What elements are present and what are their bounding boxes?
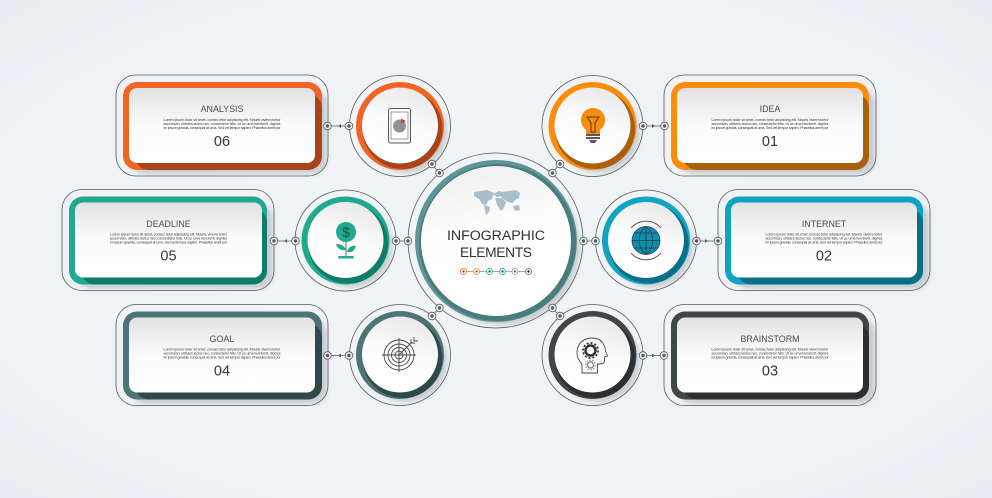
number: 05	[160, 248, 177, 264]
mini step dots	[460, 268, 532, 274]
heading: GOAL	[210, 334, 234, 344]
body text: accumsan, ultricies lectus nec, consectetur felis. Ut ac urna hendrerit, digniss	[164, 352, 281, 356]
central circle	[408, 153, 583, 328]
card: internet	[718, 190, 930, 290]
card: idea	[664, 75, 876, 176]
body text: accumsan, ultricies lectus nec, consectetur felis. Ut ac urna hendrerit, digniss	[766, 236, 883, 240]
body text	[164, 348, 281, 360]
connectors: central hub links	[392, 160, 599, 320]
body text: im ipsum gravida, consequat at urna. Sed vel tempor sapien. Phasellus amet por	[712, 356, 829, 360]
number: 04	[214, 364, 230, 380]
icon: money plant: $	[342, 224, 350, 240]
body text: Lorem ipsum dolor sit amet, consec tetur adipiscing elit. Mauris viverra tortor	[712, 118, 829, 122]
number: 06	[214, 134, 230, 150]
card: brainstorm	[664, 304, 876, 406]
body text	[164, 118, 281, 130]
heading: ANALYSIS	[201, 104, 243, 114]
card: goal	[116, 304, 328, 406]
title: ELEMENTS	[460, 245, 532, 260]
icon: globe	[631, 221, 661, 260]
body text: accumsan, ultricies lectus nec, consectetur felis. Ut ac urna hendrerit, digniss	[712, 122, 829, 126]
body text: im ipsum gravida, consequat at urna. Sed vel tempor sapien. Phasellus amet por	[110, 240, 228, 244]
connector: analysis	[324, 122, 353, 130]
body text: accumsan, ultricies lectus nec, consectetur felis. Ut ac urna hendrerit, digniss	[110, 236, 227, 240]
icon: head with gears	[577, 338, 608, 373]
heading: INTERNET	[802, 219, 847, 229]
connector: brainstorm	[639, 352, 668, 359]
circle: goal	[350, 304, 450, 406]
heading: IDEA	[760, 104, 780, 114]
icon: tablet with pie chart	[388, 108, 410, 143]
card: analysis	[116, 75, 328, 176]
body text: im ipsum gravida, consequat at urna. Sed vel tempor sapien. Phasellus amet por	[164, 126, 281, 130]
body text	[766, 232, 883, 244]
body text: Lorem ipsum dolor sit amet, consec tetur adipiscing elit. Mauris viverra tortor	[766, 232, 883, 236]
number: 01	[762, 134, 778, 150]
body text: Lorem ipsum dolor sit amet, consec tetur adipiscing elit. Mauris viverra tortor	[164, 348, 281, 352]
body text: accumsan, ultricies lectus nec, consectetur felis. Ut ac urna hendrerit, digniss	[712, 352, 829, 356]
icon: target	[382, 337, 418, 372]
body text: Lorem ipsum dolor sit amet, consec tetur adipiscing elit. Mauris viverra tortor	[164, 118, 281, 122]
body text: Lorem ipsum dolor sit amet, consec tetur adipiscing elit. Mauris viverra tortor	[110, 232, 228, 236]
number: 02	[816, 248, 832, 264]
connector: internet	[693, 237, 722, 245]
icon: light bulb	[581, 108, 605, 143]
card: deadline	[62, 190, 274, 290]
connector: idea	[639, 122, 668, 130]
body text: accumsan, ultricies lectus nec, consectetur felis. Ut ac urna hendrerit, digniss	[164, 122, 281, 126]
number: 03	[762, 364, 778, 380]
circle: idea	[542, 76, 643, 176]
icon: world map	[474, 190, 520, 215]
body text	[712, 348, 829, 360]
body text: im ipsum gravida, consequat at urna. Sed vel tempor sapien. Phasellus amet por	[712, 126, 829, 130]
body text: im ipsum gravida, consequat at urna. Sed vel tempor sapien. Phasellus amet por	[766, 240, 883, 244]
circle: brainstorm	[542, 304, 643, 406]
heading: BRAINSTORM	[740, 334, 800, 344]
body text: im ipsum gravida, consequat at urna. Sed vel tempor sapien. Phasellus amet por	[164, 356, 281, 360]
connector: deadline	[270, 237, 299, 245]
heading: DEADLINE	[146, 219, 191, 229]
body text	[110, 232, 228, 244]
title: INFOGRAPHIC	[447, 228, 545, 244]
connector: goal	[324, 352, 353, 359]
circle: deadline	[295, 190, 396, 291]
circle: analysis	[350, 76, 450, 176]
body text: Lorem ipsum dolor sit amet, consec tetur adipiscing elit. Mauris viverra tortor	[712, 348, 829, 352]
circle: internet	[596, 190, 696, 291]
body text	[712, 118, 829, 130]
title	[447, 228, 545, 260]
